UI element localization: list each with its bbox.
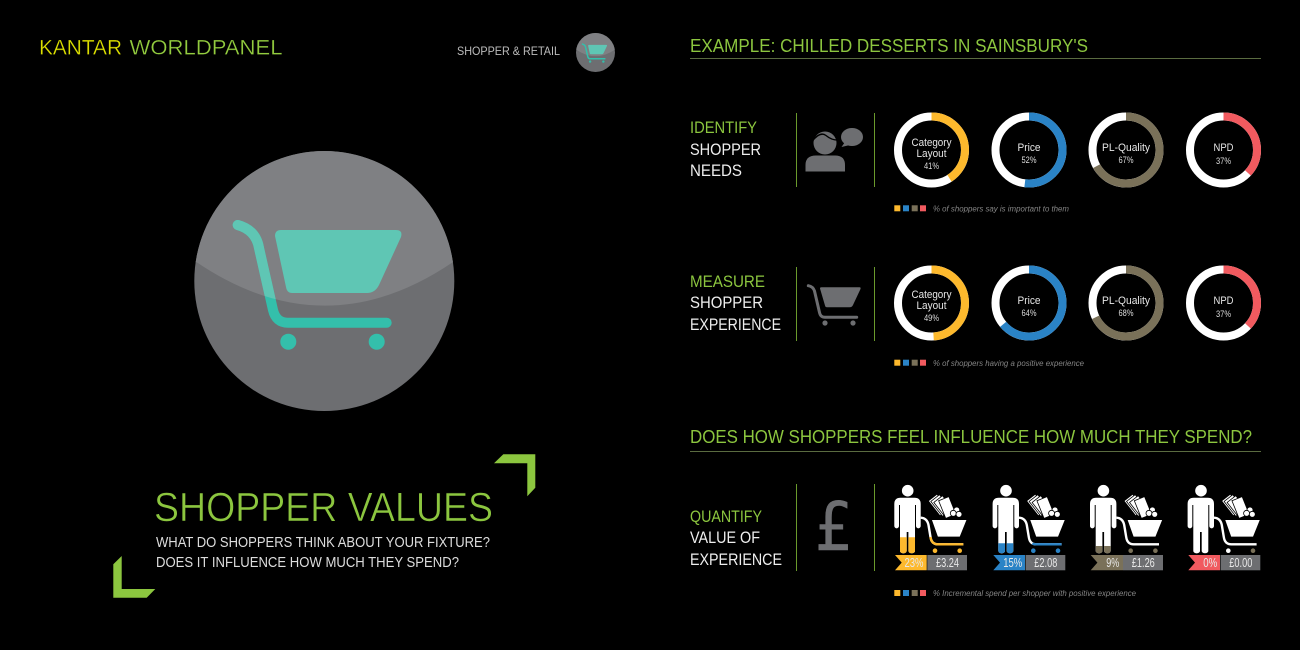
row label: identify shopper needs [690, 118, 761, 180]
row label: quantify value of experience: VALUE OF [690, 528, 760, 547]
subtitle [156, 535, 490, 571]
donut: pl-quality 67%: PL-Quality [1102, 142, 1150, 154]
icon: small shopper badge [576, 33, 615, 72]
row label: measure shopper experience: MEASURE [690, 272, 765, 291]
row label: identify shopper needs: SHOPPER [690, 140, 761, 159]
donut: price 64%: Price [1018, 295, 1040, 307]
donut: category layout 41%: Layout [916, 148, 946, 160]
row label: identify shopper needs: NEEDS [690, 161, 742, 180]
icon: large shopping cart in grey circle [194, 151, 454, 411]
donut: npd 37% [1190, 270, 1257, 336]
section label: shopper and retail: SHOPPER & RETAIL [457, 44, 560, 58]
figure: shopper 23% £3.24: £3.24 [936, 556, 959, 570]
donut: price 52%: 52% [1022, 155, 1036, 165]
subtitle: DOES IT INFLUENCE HOW MUCH THEY SPEND? [156, 555, 459, 571]
bracket: bottom left [113, 556, 155, 598]
donut: pl-quality 68% [1092, 270, 1160, 336]
figure: shopper 0% £0.00 [1188, 485, 1260, 570]
figure: shopper 15% £2.08: 15% [1003, 556, 1022, 570]
icon: grey cart [808, 286, 861, 326]
figure: shopper 9% £1.26: 9% [1106, 556, 1119, 570]
subtitle: WHAT DO SHOPPERS THINK ABOUT YOUR FIXTURE? [156, 535, 490, 551]
donut: category layout 49%: Category [912, 289, 952, 301]
bracket: top right [494, 454, 535, 496]
donut: price 52% [996, 116, 1062, 184]
donut: price 64% [996, 270, 1062, 336]
legend: experience: % of shoppers having a positive experience [933, 359, 1085, 368]
donut: category layout 49%: Layout [916, 300, 946, 312]
heading: example: EXAMPLE: CHILLED DESSERTS IN SAINSBURY'S [690, 36, 1088, 56]
row label: quantify value of experience: QUANTIFY [690, 507, 762, 526]
icon: person with speech bubble [806, 128, 863, 172]
logo: Kantar Worldpanel [39, 36, 282, 60]
logo: Kantar Worldpanel: WORLDPANEL [130, 36, 282, 60]
row label: measure shopper experience: EXPERIENCE [690, 315, 781, 334]
figure: shopper 15% £2.08 [993, 485, 1065, 570]
row label: measure shopper experience: SHOPPER [690, 293, 763, 312]
donut: category layout 49%: 49% [924, 313, 939, 323]
logo: Kantar Worldpanel: KANTAR [39, 36, 122, 60]
row label: identify shopper needs: IDENTIFY [690, 118, 757, 137]
figure: shopper 0% £0.00: 0% [1203, 556, 1217, 570]
donut: category layout 41%: 41% [924, 161, 939, 171]
row label: quantify value of experience [690, 507, 782, 569]
heading: influence question: DOES HOW SHOPPERS FEEL INFLUENCE HOW MUCH THEY SPEND? [690, 427, 1252, 447]
donut: npd 37%: 37% [1216, 156, 1231, 166]
figure: shopper 23% £3.24 [894, 485, 967, 570]
donut: pl-quality 68%: 68% [1118, 308, 1134, 318]
donut: category layout 49% [898, 270, 965, 336]
donut: pl-quality 67% [1092, 116, 1160, 184]
donut: npd 37%: 37% [1216, 309, 1231, 319]
donut: pl-quality 68%: PL-Quality [1102, 295, 1150, 307]
figure: shopper 23% £3.24: 23% [904, 556, 924, 570]
figure: shopper 15% £2.08: £2.08 [1034, 556, 1057, 570]
legend: needs: % of shoppers say is important to them [933, 204, 1069, 214]
title: SHOPPER VALUES [154, 484, 493, 530]
donut: category layout 41%: Category [912, 137, 952, 149]
donut: npd 37%: NPD [1214, 142, 1234, 154]
figure: shopper 0% £0.00: £0.00 [1229, 556, 1252, 570]
figure: shopper 9% £1.26: £1.26 [1132, 556, 1155, 570]
icon: pound sign: £ [815, 488, 853, 566]
donut: category layout 41% [898, 116, 965, 184]
legend: incremental spend: % Incremental spend per shopper with positive experience [933, 589, 1137, 598]
row label: quantify value of experience: EXPERIENCE [690, 550, 782, 569]
donut: price 52%: Price [1018, 142, 1040, 154]
row label: measure shopper experience [690, 272, 781, 334]
donut: price 64%: 64% [1022, 308, 1036, 318]
donut: npd 37%: NPD [1214, 295, 1234, 307]
donut: pl-quality 67%: 67% [1118, 155, 1134, 165]
figure: shopper 9% £1.26 [1090, 485, 1163, 570]
donut: npd 37% [1190, 116, 1257, 184]
